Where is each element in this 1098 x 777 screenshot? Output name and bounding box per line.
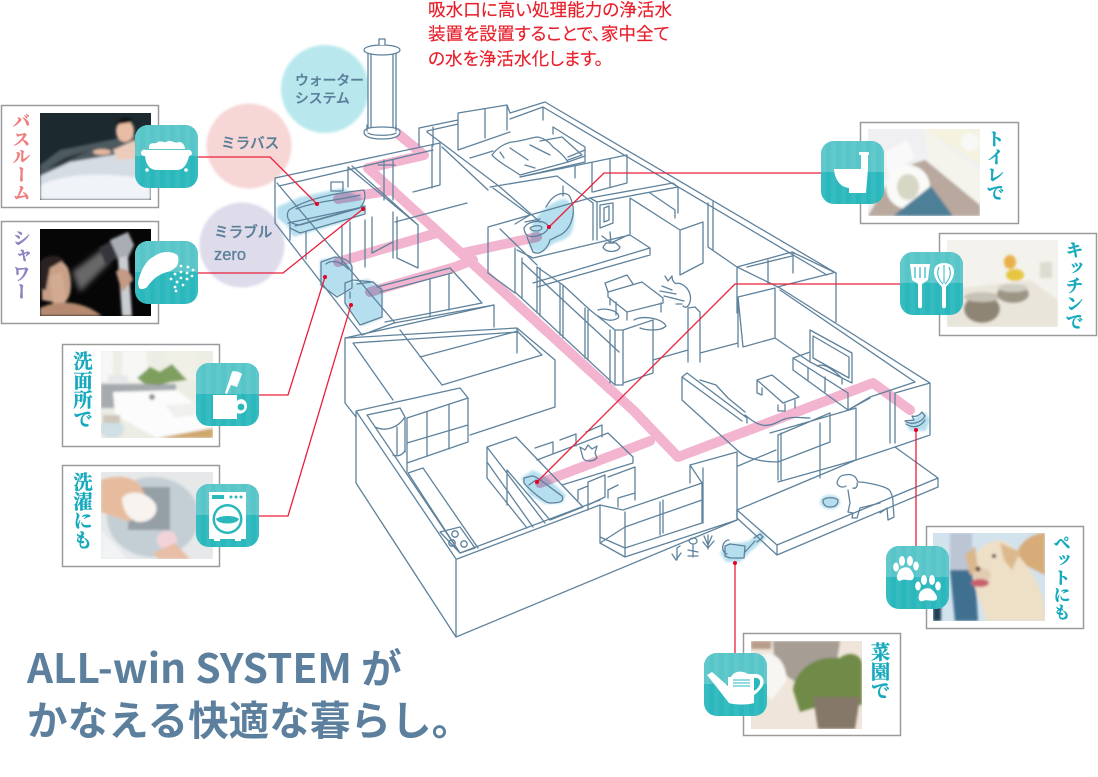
- red text: description: 吸水口に高い処理能力の浄活水: [428, 0, 672, 20]
- circle: water system: システム: [295, 87, 350, 107]
- icon: washing machine: [196, 484, 259, 547]
- card: vegetable garden: [704, 634, 900, 736]
- card: bathroom: [2, 106, 198, 208]
- card: laundry: 洗濯にも: [70, 472, 93, 549]
- icon: watering can: [704, 653, 767, 716]
- circle: mirable zero: ミラブル: [214, 221, 272, 242]
- photo: laundry: [101, 472, 213, 559]
- card: laundry: [62, 466, 259, 566]
- leader lines: [198, 157, 918, 653]
- left storage block: [345, 305, 555, 417]
- water tap: [905, 412, 925, 427]
- dining table upper room: [605, 275, 663, 320]
- icon: spatula and whisk: [900, 252, 963, 315]
- photo: wash basin: [100, 351, 213, 438]
- circle: mirabath: [206, 104, 292, 188]
- circle: mirable zero: zero: [214, 246, 246, 264]
- sink: [524, 476, 563, 503]
- circle: water system: ウォーター: [295, 69, 364, 89]
- house line art: [275, 102, 938, 637]
- bed: [492, 127, 585, 177]
- kitchen island: [487, 437, 583, 528]
- bedroom and rear walls: [419, 102, 836, 322]
- watering can: [723, 534, 763, 558]
- stove counter: [408, 468, 478, 553]
- water use highlights: [277, 188, 930, 562]
- right walls: [653, 202, 930, 447]
- card: shower: シャワー: [11, 229, 31, 300]
- card: vegetable garden: 菜園で: [868, 642, 890, 700]
- photo: shower: [40, 229, 151, 316]
- storage shelves: [375, 398, 555, 472]
- photo: dog: [933, 533, 1045, 621]
- table plant: [580, 445, 597, 461]
- cat: [660, 276, 690, 307]
- photo: plant: [751, 641, 862, 729]
- bathroom outer walls: [275, 143, 467, 335]
- icon: toothbrush and mug: [196, 363, 259, 426]
- terrace: [737, 447, 938, 555]
- circle: water system: [281, 45, 369, 133]
- photo: bath: [40, 113, 151, 200]
- dog: [837, 474, 894, 520]
- title: かなえる快適な暮らし。: [27, 688, 472, 747]
- card: pet: [886, 526, 1084, 628]
- wall panels behind toilet room: [520, 155, 627, 192]
- photo: kitchen: [947, 240, 1058, 327]
- dining table and chairs: [535, 425, 635, 510]
- circle: mirabath: ミラバス: [221, 132, 279, 153]
- front left wall: [356, 388, 737, 637]
- red text: description: 装置を設置することで、家中全て: [428, 24, 670, 44]
- dining room glass walls: [515, 248, 653, 385]
- stove burners: [449, 531, 467, 547]
- title: ALL-win SYSTEM が: [26, 636, 402, 695]
- card: toilet: トイレで: [985, 130, 1005, 201]
- toilet room walls: [488, 176, 678, 293]
- red text: description: の水を浄活水化します。: [428, 49, 603, 69]
- card: shower: [2, 222, 198, 324]
- card: wash basin: [62, 344, 259, 446]
- garden flowers: [672, 535, 714, 560]
- toilet: [524, 186, 573, 253]
- dog bowl: [823, 498, 838, 507]
- red text: description: [428, 0, 672, 69]
- icon: paw prints: [886, 546, 949, 609]
- card: pet: ペットにも: [1050, 534, 1070, 620]
- icon: bathtub: [135, 125, 198, 188]
- laundry room: [362, 268, 494, 335]
- hall shelf and plant: [517, 198, 703, 287]
- water system tank: [364, 39, 400, 139]
- card: bathroom: バスルーム: [11, 112, 31, 201]
- card: kitchen: キッチンで: [1064, 241, 1084, 330]
- coffee table: [757, 375, 799, 411]
- icon: toilet: [821, 141, 884, 204]
- front planter: [600, 452, 737, 557]
- bathroom fixtures: [287, 182, 393, 267]
- card: kitchen: [900, 234, 1096, 336]
- card: wash basin: 洗面所で: [70, 351, 93, 428]
- water pipes: [338, 133, 910, 483]
- photo: toilet: [868, 129, 980, 216]
- card: toilet: [821, 122, 1018, 224]
- wash basin and washer: [321, 257, 382, 325]
- icon: shower head: [135, 241, 198, 304]
- title: [26, 636, 472, 747]
- circle: mirable zero: [200, 202, 284, 288]
- television and tv stand: [793, 330, 852, 410]
- sofa: [682, 373, 895, 482]
